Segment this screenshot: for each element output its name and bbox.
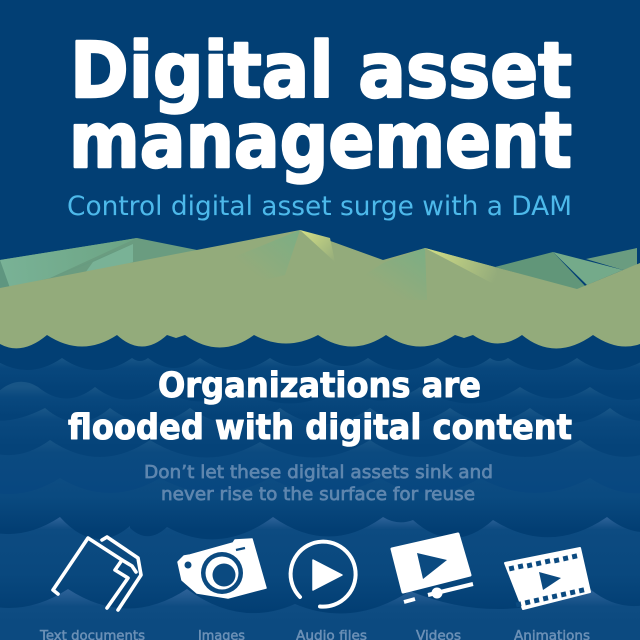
mountains: [0, 230, 640, 348]
section heading: Organizations are: [158, 366, 481, 406]
back right mountain facets: [495, 248, 637, 290]
icon: videos: [392, 534, 473, 602]
title: [69, 27, 572, 186]
front land with scalloped waterline: [0, 230, 640, 348]
land light facets: [130, 230, 505, 315]
icon: camera: [178, 539, 266, 598]
title: management: [69, 97, 572, 186]
icon labels: [39, 629, 590, 640]
title: Digital asset: [70, 27, 572, 116]
icon: audio files: [291, 542, 356, 607]
section description: [144, 462, 493, 505]
water wave layers: [0, 358, 640, 640]
subtitle: Control digital asset surge with a DAM: [67, 191, 572, 222]
icon: animations: [505, 548, 590, 609]
section heading: flooded with digital content: [68, 408, 572, 448]
back left mountain facets: [0, 238, 240, 300]
section description: Don’t let these digital assets sink and: [144, 462, 493, 483]
section description: never rise to the surface for reuse: [161, 484, 475, 505]
icon: text documents: [53, 537, 141, 610]
section heading: [68, 366, 572, 448]
